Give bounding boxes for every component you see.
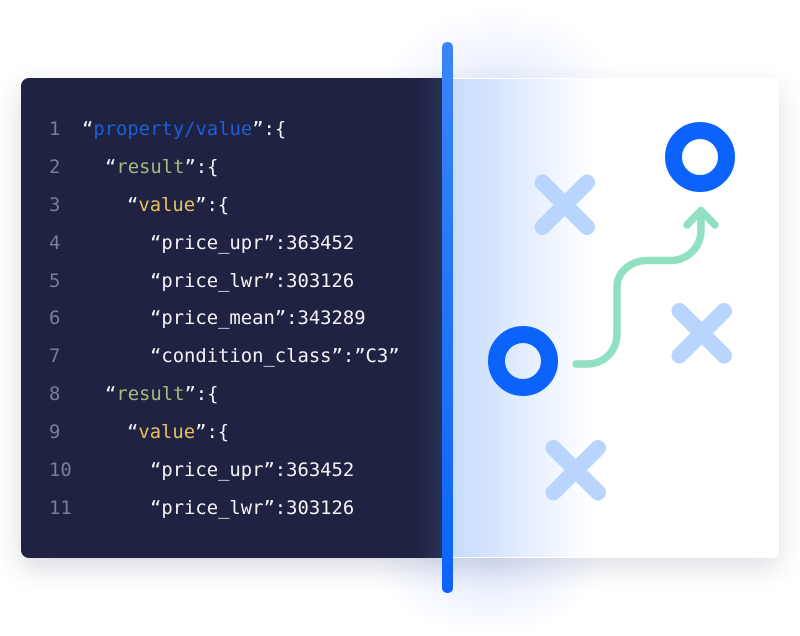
blue glow above the divider <box>385 8 615 158</box>
line numbers and code text: “price_upr”:363452 <box>150 233 354 254</box>
line numbers and code text: 9 <box>49 422 60 443</box>
line numbers and code text: “price_lwr”:303126 <box>150 498 354 519</box>
line numbers and code text: 7 <box>49 346 60 367</box>
line numbers and code text: 6 <box>49 308 60 329</box>
line numbers and code text: “price_upr”:363452 <box>150 460 354 481</box>
blue glow below the divider <box>375 480 605 636</box>
blue fade across white card <box>453 79 593 557</box>
icon: circle target <box>674 130 726 184</box>
divider bar <box>442 42 453 593</box>
line numbers and code text: “condition_class”:”C3” <box>150 346 400 367</box>
line numbers and code text: “result”:{ <box>105 384 218 405</box>
icon: circle start <box>496 334 550 388</box>
line numbers and code text: “result”:{ <box>105 157 218 178</box>
icon: cross right <box>680 311 724 356</box>
line numbers and code text: 1 <box>49 119 60 140</box>
line numbers and code text: 4 <box>49 233 60 254</box>
icon: cross top left <box>542 182 587 227</box>
line numbers and code text: 2 <box>49 157 60 178</box>
line numbers and code text: “price_lwr”:303126 <box>150 271 354 292</box>
line numbers and code text: 11 <box>49 498 72 519</box>
line numbers and code text: 3 <box>49 195 60 216</box>
icon: cross bottom <box>554 448 598 492</box>
panel: white diagram card <box>443 78 779 558</box>
line numbers and code text: “value”:{ <box>127 195 229 216</box>
line numbers and code text: “property/value”:{ <box>82 119 286 140</box>
line numbers and code text: 8 <box>49 384 60 405</box>
line numbers and code text: “value”:{ <box>127 422 229 443</box>
line numbers and code text <box>49 119 400 519</box>
panel: dark code card <box>21 78 445 558</box>
arrow: curved path <box>576 210 715 364</box>
line numbers and code text: 10 <box>49 460 72 481</box>
line numbers and code text: 5 <box>49 271 60 292</box>
line numbers and code text: “price_mean”:343289 <box>150 308 366 329</box>
